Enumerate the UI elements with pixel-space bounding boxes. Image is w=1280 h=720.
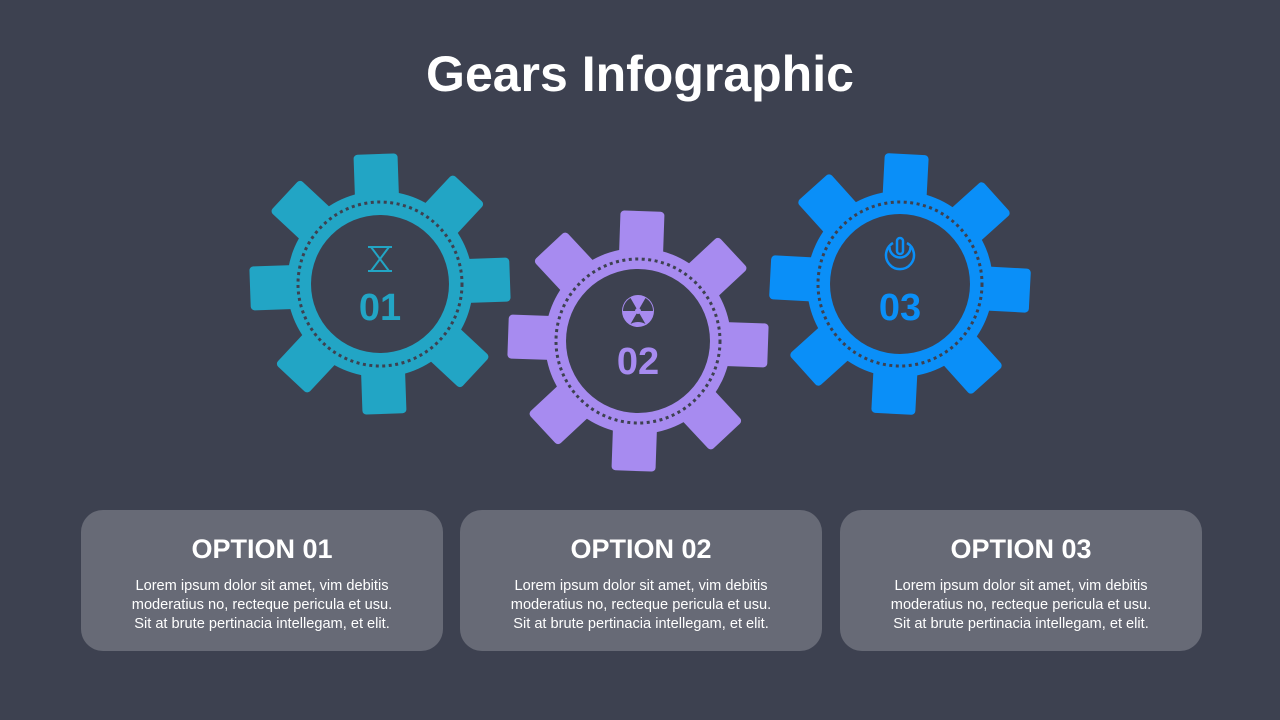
panel: option 03: Lorem ipsum dolor sit amet, vim debitis — [894, 578, 1148, 594]
panel: option 03: OPTION 03 — [950, 534, 1092, 564]
panel: option 02: moderatius no, recteque pericula et usu. — [511, 597, 771, 613]
panel: option 02 — [460, 510, 822, 651]
panel: option 02: OPTION 02 — [570, 534, 712, 564]
number 01: 01 — [359, 287, 401, 329]
panel: option 01: moderatius no, recteque pericula et usu. — [132, 597, 392, 613]
icon: hourglass — [368, 247, 392, 271]
panel: option 01 — [81, 510, 443, 651]
panel: option 01: OPTION 01 — [191, 534, 333, 564]
icon: power — [886, 238, 914, 269]
panel: option 03 — [840, 510, 1202, 651]
panel: option 01: Lorem ipsum dolor sit amet, vim debitis — [135, 578, 389, 594]
icon: radiation — [622, 295, 654, 327]
gear 01 — [246, 150, 514, 418]
panel: option 02: Sit at brute pertinacia intellegam, et elit. — [513, 616, 769, 632]
gear 03 — [763, 147, 1037, 421]
number 03: 03 — [879, 287, 921, 329]
gear 02 — [504, 207, 772, 475]
panel: option 03: moderatius no, recteque pericula et usu. — [891, 597, 1151, 613]
panel: option 03: Sit at brute pertinacia intellegam, et elit. — [893, 616, 1149, 632]
number 02: 02 — [617, 341, 659, 383]
panel: option 01: Sit at brute pertinacia intellegam, et elit. — [134, 616, 390, 632]
title: Gears Infographic — [426, 46, 854, 102]
panel: option 02: Lorem ipsum dolor sit amet, vim debitis — [514, 578, 768, 594]
